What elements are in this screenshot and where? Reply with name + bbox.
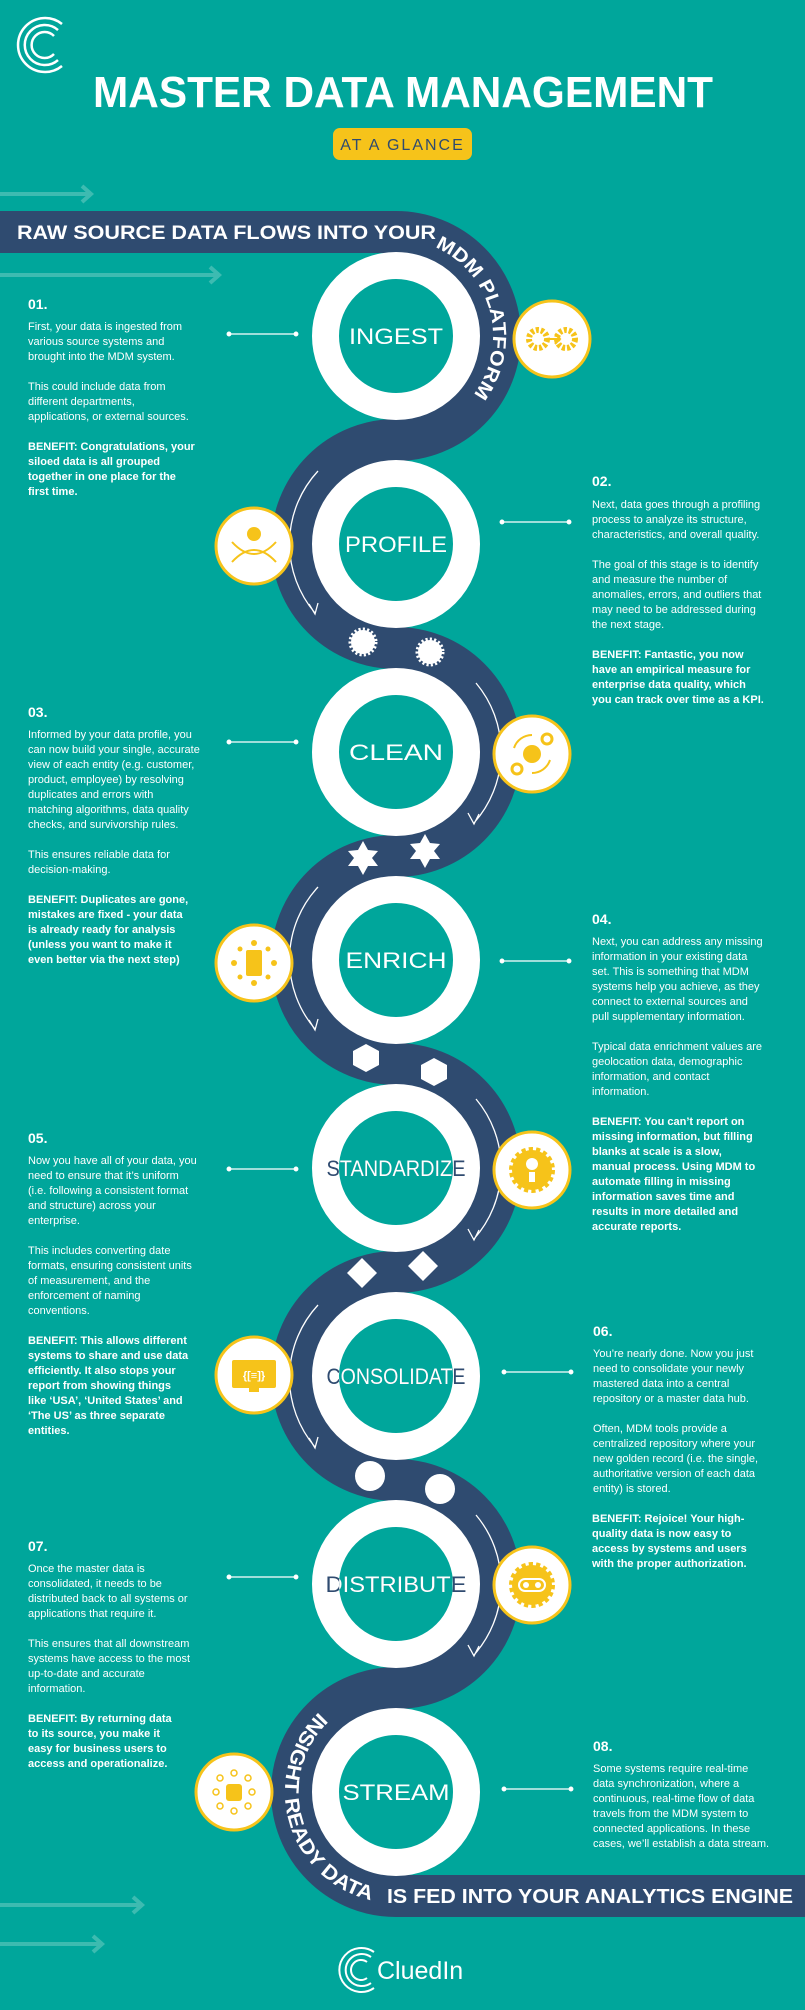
flow arrows inside band <box>290 471 501 1656</box>
text block: 04: automate filling in missing <box>592 1176 731 1188</box>
ring: consolidate <box>326 1306 466 1446</box>
text block: 06: centralized repository where your <box>593 1438 755 1450</box>
text block: 03: is already ready for analysis <box>28 924 175 936</box>
text block: 01: This could include data from <box>28 381 166 393</box>
ring: clean <box>326 682 466 822</box>
text block: 08: cases, we’ll establish a data stream. <box>593 1838 769 1850</box>
text block: 07: BENEFIT: By returning data <box>28 1713 173 1725</box>
text block: 08: data synchronization, where a <box>593 1778 740 1790</box>
text block: 08: connected applications. In these <box>593 1823 750 1835</box>
separators between rings <box>347 630 455 1504</box>
text block: 03: BENEFIT: Duplicates are gone, <box>28 894 188 906</box>
band heading: raw source data: RAW SOURCE DATA FLOWS INTO YOUR <box>17 223 436 244</box>
text block: 05: need to ensure that it’s uniform <box>28 1170 179 1182</box>
text block: 05: conventions. <box>28 1305 90 1317</box>
text block: 01: BENEFIT: Congratulations, your <box>28 441 196 453</box>
text block: 03: matching algorithms, data quality <box>28 804 189 816</box>
subtitle pill: at a glance <box>333 128 472 160</box>
text block: 05: enforcement of naming <box>28 1290 141 1302</box>
text block: 03: duplicates and errors with <box>28 789 153 801</box>
text block: 07: distributed back to all systems or <box>28 1593 188 1605</box>
text block: 04: information, and contact <box>592 1071 709 1083</box>
text block: 07: up-to-date and accurate <box>28 1668 145 1680</box>
icon: profile dna <box>216 508 292 584</box>
text block: 02: and measure the number of <box>592 574 728 586</box>
text block: 04: BENEFIT: You can’t report on <box>592 1116 745 1128</box>
icon: distribute gear <box>494 1547 570 1623</box>
text block: 01: various source systems and <box>28 336 164 348</box>
text block: 06: mastered data into a central <box>593 1378 729 1390</box>
text block: 02: may need to be addressed during <box>592 604 756 616</box>
text block: 07 <box>28 1538 193 1770</box>
text block: 02: enterprise data quality, which <box>592 679 746 691</box>
text block: 08: travels from the MDM system to <box>593 1808 748 1820</box>
text block: 08 <box>593 1738 769 1850</box>
text block: 05: formats, ensuring consistent units <box>28 1260 192 1272</box>
text block: 01: 01. <box>28 296 47 312</box>
text block: 06: Often, MDM tools provide a <box>593 1423 728 1435</box>
text block: 04: missing information, but filling <box>592 1131 753 1143</box>
text block: 04: information in your existing data <box>592 951 748 963</box>
text block: 06: quality data is now easy to <box>592 1528 732 1540</box>
text block: 01: First, your data is ingested from <box>28 321 182 333</box>
text block: 04: accurate reports. <box>592 1221 681 1233</box>
text block: 03: (unless you want to make it <box>28 939 172 951</box>
text block: 03: view of each entity (e.g. customer, <box>28 759 194 771</box>
ring: distribute <box>326 1514 466 1654</box>
text block: 04: information. <box>592 1086 649 1098</box>
text block: 07: easy for business users to <box>28 1743 167 1755</box>
text block: 01 <box>28 296 198 498</box>
text block: 04 <box>592 911 766 1233</box>
text block: 03: checks, and survivorship rules. <box>28 819 178 831</box>
text block: 07: Once the master data is <box>28 1563 145 1575</box>
text block: 04: manual process. Using MDM to <box>592 1161 755 1173</box>
icon: stream database <box>196 1754 272 1830</box>
icon: ingest gears <box>514 301 590 377</box>
text block: 02: The goal of this stage is to identify <box>592 559 759 571</box>
text block: 06: authoritative version of each data <box>593 1468 756 1480</box>
arrow: decorative bottom <box>0 1897 142 1952</box>
text block: 02: characteristics, and overall quality. <box>592 529 759 541</box>
text block: 05: like ‘USA’, ‘United States’ and <box>28 1395 183 1407</box>
text block: 04: information saves time and <box>592 1191 734 1203</box>
text block: 05: BENEFIT: This allows different <box>28 1335 187 1347</box>
text block: 05: 05. <box>28 1130 47 1146</box>
text block: 01: first time. <box>28 486 78 498</box>
text block: 05: and structure) across your <box>28 1200 156 1212</box>
text block: 05: report from showing things <box>28 1380 171 1392</box>
text block: 01: siloed data is all grouped <box>28 456 160 468</box>
ring: distribute: DISTRIBUTE <box>326 1572 466 1597</box>
text block: 04: set. This is something that MDM <box>592 966 749 978</box>
ring: stream <box>326 1722 466 1862</box>
band heading: insight ready data <box>285 1713 793 1908</box>
text block: 03: 03. <box>28 704 47 720</box>
text block: 03 <box>28 704 203 966</box>
footer logo: CluedIn: CluedIn <box>377 1957 463 1985</box>
text block: 04: geolocation data, demographic <box>592 1056 743 1068</box>
band heading: raw source data: MDM PLATFORM <box>436 236 506 400</box>
ring: consolidate: CONSOLIDATE <box>326 1364 466 1389</box>
title: MASTER DATA MANAGEMENT <box>93 68 713 117</box>
text block: 03: decision-making. <box>28 864 111 876</box>
text block: 07: 07. <box>28 1538 47 1554</box>
text block: 02: have an empirical measure for <box>592 664 751 676</box>
text block: 04: Next, you can address any missing <box>592 936 763 948</box>
ring: ingest: INGEST <box>349 324 443 349</box>
ring: consolidate: CONSOLIDATE <box>326 1364 466 1389</box>
text block: 04: systems help you achieve, as they <box>592 981 760 993</box>
text block: 07: to its source, you make it <box>28 1728 160 1740</box>
text block: 02: 02. <box>592 473 611 489</box>
text block: 04: Typical data enrichment values are <box>592 1041 762 1053</box>
band heading: insight ready data: INSIGHT READY DATA <box>285 1713 370 1900</box>
text block: 01: applications, or external sources. <box>28 411 189 423</box>
text block: 08: continuous, real-time flow of data <box>593 1793 755 1805</box>
text block: 01: brought into the MDM system. <box>28 351 175 363</box>
text block: 07: systems have access to the most <box>28 1653 190 1665</box>
text block: 02: BENEFIT: Fantastic, you now <box>592 649 744 661</box>
ring: profile: PROFILE <box>345 532 447 557</box>
text block: 01: different departments, <box>28 396 135 408</box>
text block: 05: entities. <box>28 1425 70 1437</box>
ring: standardize: STANDARDIZE <box>326 1156 466 1181</box>
text block: 05: ‘The US’ as three separate <box>28 1410 165 1422</box>
band heading: insight ready data: IS FED INTO YOUR ANALYTICS ENGINE <box>387 1886 793 1908</box>
icon: consolidate monitor: {[≡]} <box>243 1370 266 1382</box>
icon: enrich device <box>216 925 292 1001</box>
icon: standardize gear <box>494 1132 570 1208</box>
text block: 04: results in more detailed and <box>592 1206 738 1218</box>
text block: 06: with the proper authorization. <box>591 1558 747 1570</box>
text block: 06: repository or a master data hub. <box>593 1393 749 1405</box>
text block: 04: blanks at scale is a slow, <box>592 1146 722 1158</box>
text block: 03: even better via the next step) <box>28 954 180 966</box>
text block: 02: anomalies, errors, and outliers that <box>592 589 761 601</box>
text block: 03: product, employee) by resolving <box>28 774 184 786</box>
text block: 05: Now you have all of your data, you <box>28 1155 197 1167</box>
footer logo: CluedIn <box>339 1948 463 1992</box>
ring: profile <box>326 474 466 614</box>
text block: 04: pull supplementary information. <box>592 1011 745 1023</box>
text block: 07: access and operationalize. <box>28 1758 167 1770</box>
text block: 02: process to analyze its structure, <box>592 514 747 526</box>
text block: 02 <box>592 473 764 706</box>
text block: 01: together in one place for the <box>28 471 176 483</box>
text block: 05: enterprise. <box>28 1215 80 1227</box>
text block: 07: information. <box>28 1683 85 1695</box>
text block: 02: you can track over time as a KPI. <box>592 694 764 706</box>
text block: 07: consolidated, it needs to be <box>28 1578 162 1590</box>
ring: stream: STREAM <box>342 1780 450 1805</box>
text block: 04: 04. <box>592 911 611 927</box>
band heading: raw source data <box>17 223 506 400</box>
text block: 03: Informed by your data profile, you <box>28 729 192 741</box>
text block: 07: applications that require it. <box>28 1608 156 1620</box>
text block: 05: This includes converting date <box>28 1245 170 1257</box>
ring: enrich: ENRICH <box>346 948 446 973</box>
arrow: decorative top <box>0 186 219 283</box>
text block: 02: the next stage. <box>592 619 664 631</box>
text block: 03: This ensures reliable data for <box>28 849 170 861</box>
text block: 03: can now build your single, accurate <box>28 744 200 756</box>
subtitle pill: at a glance: AT A GLANCE <box>340 137 465 154</box>
text block: 04: connect to external sources and <box>592 996 748 1008</box>
text block: 07: This ensures that all downstream <box>28 1638 189 1650</box>
text block: 05: systems to share and use data <box>28 1350 189 1362</box>
text block: 02: Next, data goes through a profiling <box>592 499 760 511</box>
text block: 05 <box>28 1130 200 1437</box>
connectors <box>227 332 573 1791</box>
ring: distribute: DISTRIBUTE <box>326 1572 466 1597</box>
text block: 08: Some systems require real-time <box>593 1763 748 1775</box>
text block: 05: of measurement, and the <box>28 1275 150 1287</box>
icon: consolidate monitor <box>216 1337 292 1413</box>
ring: standardize <box>326 1098 466 1238</box>
text block: 06: access by systems and users <box>592 1543 747 1555</box>
text block: 06: 06. <box>593 1323 612 1339</box>
text block: 06 <box>591 1323 761 1570</box>
text block: 06: BENEFIT: Rejoice! Your high- <box>592 1513 745 1525</box>
text block: 06: You’re nearly done. Now you just <box>593 1348 753 1360</box>
ring: clean: CLEAN <box>349 740 443 765</box>
ring: enrich <box>326 890 466 1030</box>
ring: standardize: STANDARDIZE <box>326 1156 466 1181</box>
text block: 03: mistakes are fixed - your data <box>28 909 184 921</box>
text block: 05: efficiently. It also stops your <box>28 1365 176 1377</box>
logo: top C mark <box>18 18 62 72</box>
text block: 06: need to consolidate your newly <box>593 1363 745 1375</box>
text block: 08: 08. <box>593 1738 612 1754</box>
icon: clean cycle gears <box>494 716 570 792</box>
text block: 06: entity) is stored. <box>593 1483 671 1495</box>
ring: ingest <box>326 266 466 406</box>
text block: 06: new golden record (i.e. the single, <box>593 1453 758 1465</box>
text block: 05: (i.e. following a consistent format <box>28 1185 188 1197</box>
